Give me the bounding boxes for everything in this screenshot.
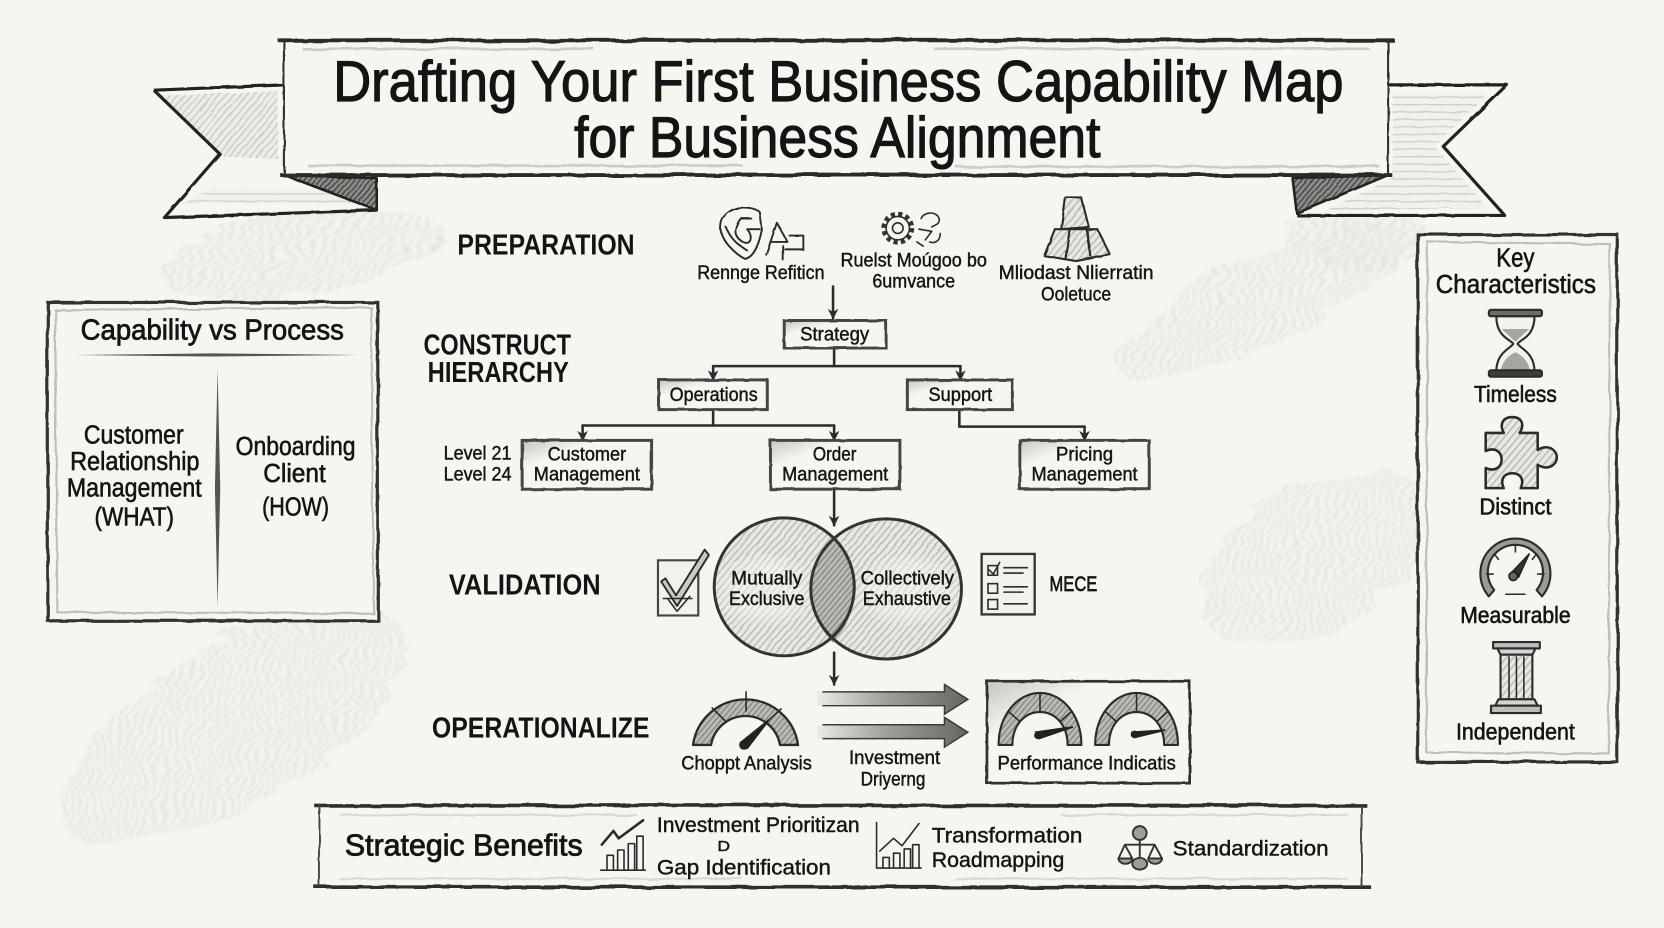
box: operations xyxy=(659,380,767,410)
box: support: Support xyxy=(929,385,993,406)
icon: checklist xyxy=(982,554,1035,614)
gauge: performance two xyxy=(1095,693,1178,745)
heading: strategic benefits: Strategic Benefits xyxy=(345,827,583,862)
icon: speedometer xyxy=(1480,539,1550,596)
panel: strategic benefits xyxy=(314,805,1371,887)
column: capability: Relationship xyxy=(70,448,200,476)
box: customer management xyxy=(522,440,652,489)
panel heading: Characteristics xyxy=(1436,271,1596,299)
left ribbon tail xyxy=(154,85,377,218)
icon: head and figure xyxy=(721,208,803,260)
column: capability xyxy=(67,422,202,531)
panel heading: Key xyxy=(1496,244,1535,272)
item: independent xyxy=(1456,642,1575,745)
icon: hourglass xyxy=(1489,310,1542,377)
arrow: preparation to strategy xyxy=(832,287,834,318)
label: second preparation item xyxy=(840,250,987,293)
label: gauge left: Choppt Analysis xyxy=(681,753,812,774)
title text: for Business Alignment xyxy=(574,106,1101,170)
right ribbon tail xyxy=(1293,85,1507,215)
banner body xyxy=(278,40,1394,175)
item: measurable xyxy=(1460,539,1571,628)
column: process xyxy=(236,433,356,522)
heading: operationalize: OPERATIONALIZE xyxy=(432,713,649,745)
box: order management: Management xyxy=(782,465,889,486)
heading: construct hierarchy: HIERARCHY xyxy=(428,357,569,389)
label: measurable: Measurable xyxy=(1460,602,1571,628)
label: second preparation item: Ruelst Moúgoo bo xyxy=(840,250,987,271)
label: third preparation item: Mliodast Nlierratin xyxy=(999,263,1154,284)
label: transformation roadmapping xyxy=(932,825,1082,872)
column: capability: Management xyxy=(67,475,202,503)
label: investment driving: Driyerng xyxy=(861,769,925,790)
heading: validation: VALIDATION xyxy=(449,569,601,601)
label: transformation roadmapping: Roadmapping xyxy=(932,849,1064,872)
item: distinct xyxy=(1479,417,1557,520)
label: investment prioritization and gap identification xyxy=(657,814,860,879)
venn label: mutually exclusive: Mutually xyxy=(731,569,803,590)
label: independent: Independent xyxy=(1456,719,1575,745)
label: levels xyxy=(444,443,512,486)
background pencil smudges xyxy=(24,193,1463,894)
box: order management: Order xyxy=(813,445,857,466)
icon: pillar xyxy=(1491,642,1541,713)
icon: rising bar chart xyxy=(601,820,645,870)
venn label: collectively exhaustive xyxy=(861,569,954,610)
column: process: Client xyxy=(263,460,326,488)
venn label: collectively exhaustive: Collectively xyxy=(861,569,954,590)
label: investment driving xyxy=(849,748,941,790)
label: transformation roadmapping: Transformation xyxy=(932,825,1082,848)
gauge: left xyxy=(693,692,798,750)
label: second preparation item: 6umvance xyxy=(872,272,955,293)
icon: stacked blocks xyxy=(1044,197,1110,261)
venn label: mutually exclusive: Exclusive xyxy=(729,589,804,610)
panel: performance indicators xyxy=(987,681,1190,783)
panel: capability vs process xyxy=(48,302,378,621)
title text: Drafting Your First Business Capability Map xyxy=(333,50,1343,114)
arrow: upper block arrow xyxy=(817,684,968,714)
box: strategy: Strategy xyxy=(800,325,870,346)
label: distinct: Distinct xyxy=(1479,494,1552,520)
arrow: hierarchy to validation xyxy=(833,490,835,525)
label: third preparation item xyxy=(999,263,1154,305)
label: first preparation item: Rennge Refiticn xyxy=(697,263,825,284)
box: pricing management: Management xyxy=(1032,465,1138,486)
title text xyxy=(333,50,1343,170)
heading: preparation: PREPARATION xyxy=(457,230,635,262)
heading: construct hierarchy xyxy=(423,329,571,389)
column: process: (HOW) xyxy=(262,494,329,522)
venn diagram: MECE xyxy=(714,518,961,659)
gauge: performance one xyxy=(999,693,1081,745)
title banner xyxy=(154,40,1507,218)
box: operations: Operations xyxy=(670,385,758,406)
label: investment driving: Investment xyxy=(849,748,941,769)
panel heading: Capability vs Process xyxy=(81,315,344,347)
box: support xyxy=(907,380,1012,410)
label: levels: Level 21 xyxy=(444,443,512,464)
label: MECE: MECE xyxy=(1050,573,1097,596)
label: levels: Level 24 xyxy=(444,465,512,486)
column: capability: (WHAT) xyxy=(94,503,174,531)
venn label: collectively exhaustive: Exhaustive xyxy=(863,589,951,610)
icon: gears xyxy=(883,213,940,246)
item: timeless xyxy=(1474,310,1557,407)
label: standardization: Standardization xyxy=(1173,837,1329,860)
hierarchy connectors xyxy=(583,348,1085,440)
panel frame xyxy=(48,302,378,621)
box: strategy xyxy=(784,320,886,348)
label: investment prioritization and gap identification: Investment Prioritizan xyxy=(657,814,860,837)
arrow: validation to operationalize xyxy=(833,653,835,684)
column: process: Onboarding xyxy=(236,433,356,461)
box: customer management: Customer xyxy=(548,445,627,466)
icon: puzzle piece xyxy=(1486,417,1557,488)
icon: roadmap chart xyxy=(877,822,921,868)
label: investment prioritization and gap identification: D xyxy=(717,839,730,855)
icon: checkbox with tick xyxy=(658,550,709,615)
box: customer management: Management xyxy=(534,465,641,486)
label: third preparation item: Ooletuce xyxy=(1041,284,1111,305)
column: capability: Customer xyxy=(84,422,184,450)
heading: construct hierarchy: CONSTRUCT xyxy=(423,329,571,361)
arrow: lower block arrow xyxy=(817,717,968,747)
label: investment prioritization and gap identification: Gap Identification xyxy=(657,856,831,879)
panel heading xyxy=(1436,244,1596,299)
icon: balance scale xyxy=(1119,826,1162,870)
label: performance indicators: Performance Indicatis xyxy=(998,753,1176,774)
panel: key characteristics xyxy=(1418,235,1617,762)
label: timeless: Timeless xyxy=(1474,381,1557,407)
box: order management xyxy=(770,440,900,489)
box: pricing management xyxy=(1020,440,1149,489)
panel frame xyxy=(1418,235,1617,762)
box: pricing management: Pricing xyxy=(1056,445,1113,466)
venn label: mutually exclusive xyxy=(729,569,804,610)
